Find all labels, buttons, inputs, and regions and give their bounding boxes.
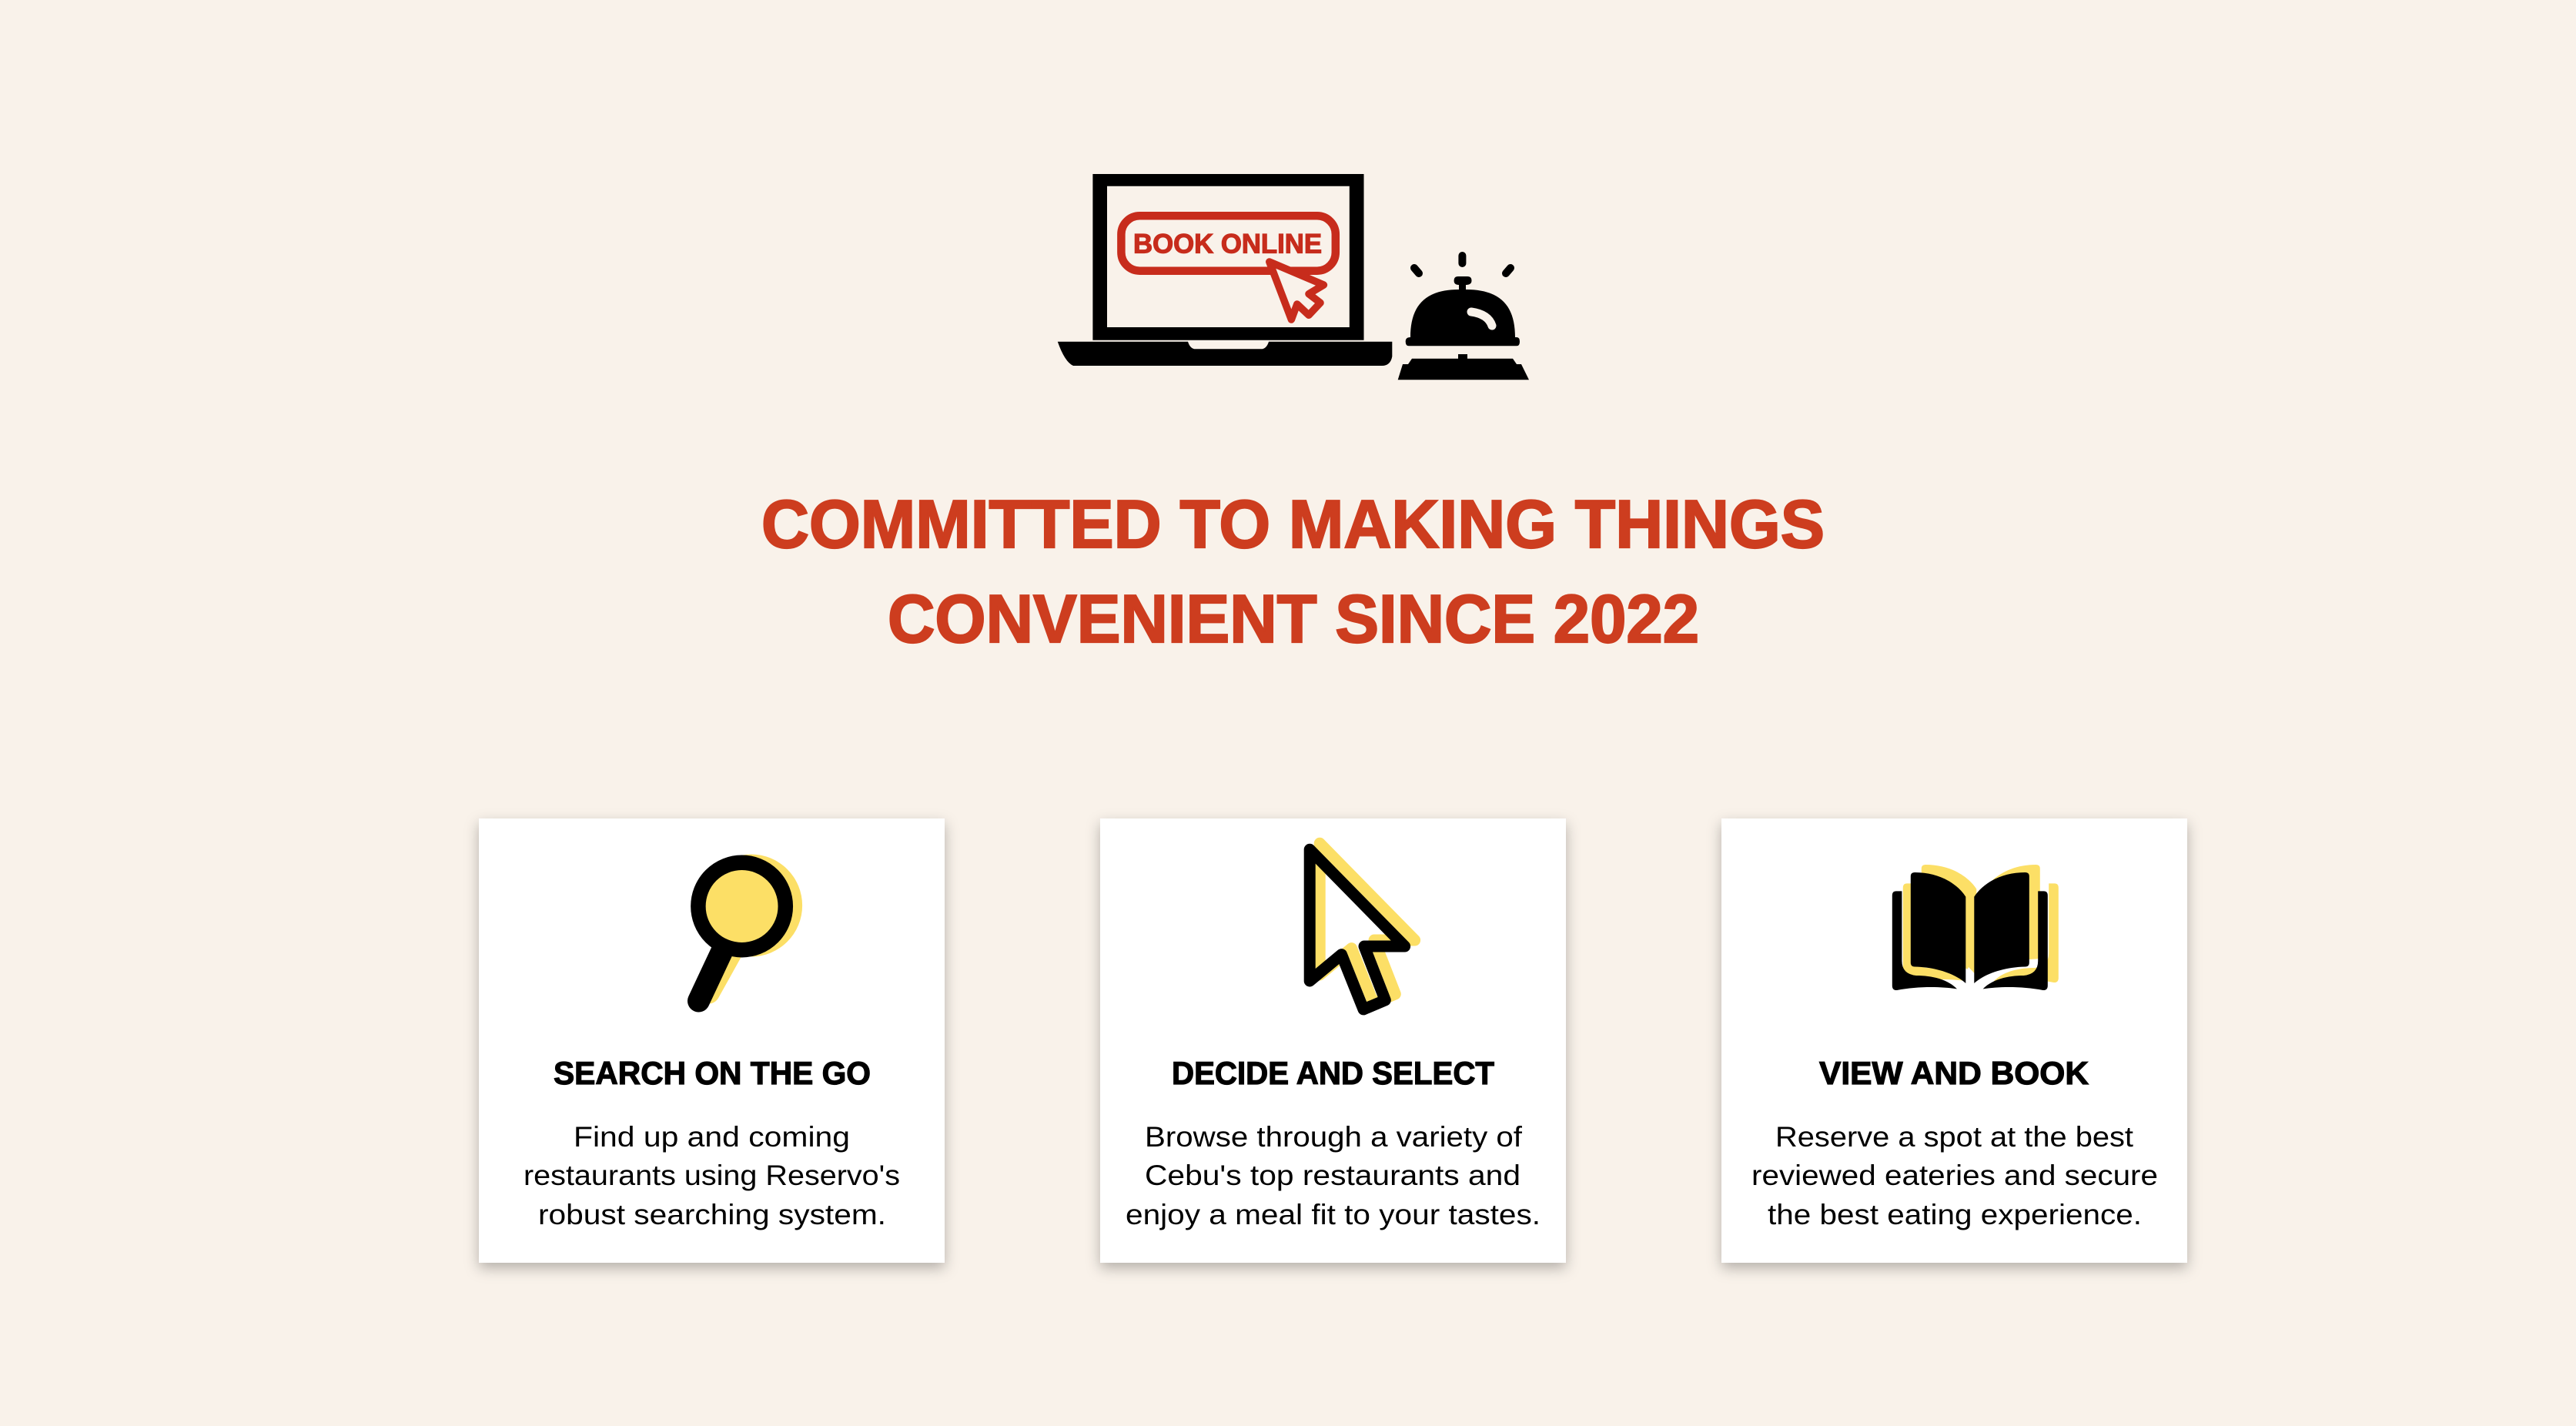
cursor on button <box>1270 262 1323 320</box>
description: restaurants using Reservo's <box>524 1160 900 1191</box>
heading: VIEW AND BOOK <box>1819 1055 2089 1091</box>
description <box>1751 1121 2158 1230</box>
icon: service bell <box>1398 256 1529 380</box>
title: CONVENIENT SINCE 2022 <box>888 581 1699 657</box>
book online button <box>1121 216 1336 271</box>
description: Cebu's top restaurants and <box>1145 1160 1521 1191</box>
heading: SEARCH ON THE GO <box>554 1055 871 1091</box>
description: reviewed eateries and secure <box>1751 1160 2158 1191</box>
description: enjoy a meal fit to your tastes. <box>1126 1199 1541 1230</box>
panel: search on the go <box>479 818 945 1263</box>
icon: cursor arrow <box>1310 843 1415 1009</box>
heading: DECIDE AND SELECT <box>1172 1055 1494 1091</box>
description <box>1126 1121 1541 1230</box>
description: the best eating experience. <box>1768 1199 2142 1230</box>
laptop screen frame <box>1092 174 1364 340</box>
description: Browse through a variety of <box>1145 1121 1523 1153</box>
description: robust searching system. <box>538 1199 886 1230</box>
description: Find up and coming <box>574 1121 850 1153</box>
description: Reserve a spot at the best <box>1775 1121 2134 1153</box>
panel: decide and select <box>1100 818 1566 1263</box>
laptop base <box>1058 342 1392 366</box>
description <box>524 1121 900 1230</box>
bell ring marks <box>1414 256 1510 273</box>
icon: laptop with book online button <box>1058 174 1392 366</box>
bell stand <box>1398 354 1529 380</box>
bell dome <box>1406 276 1520 346</box>
title <box>761 486 1825 657</box>
icon: magnifying glass <box>698 855 802 1001</box>
bell highlight <box>1471 312 1492 326</box>
icon: open book <box>1892 865 2059 993</box>
panel: view and book <box>1721 818 2187 1263</box>
book online button: BOOK ONLINE <box>1133 229 1322 259</box>
title: COMMITTED TO MAKING THINGS <box>761 486 1825 562</box>
